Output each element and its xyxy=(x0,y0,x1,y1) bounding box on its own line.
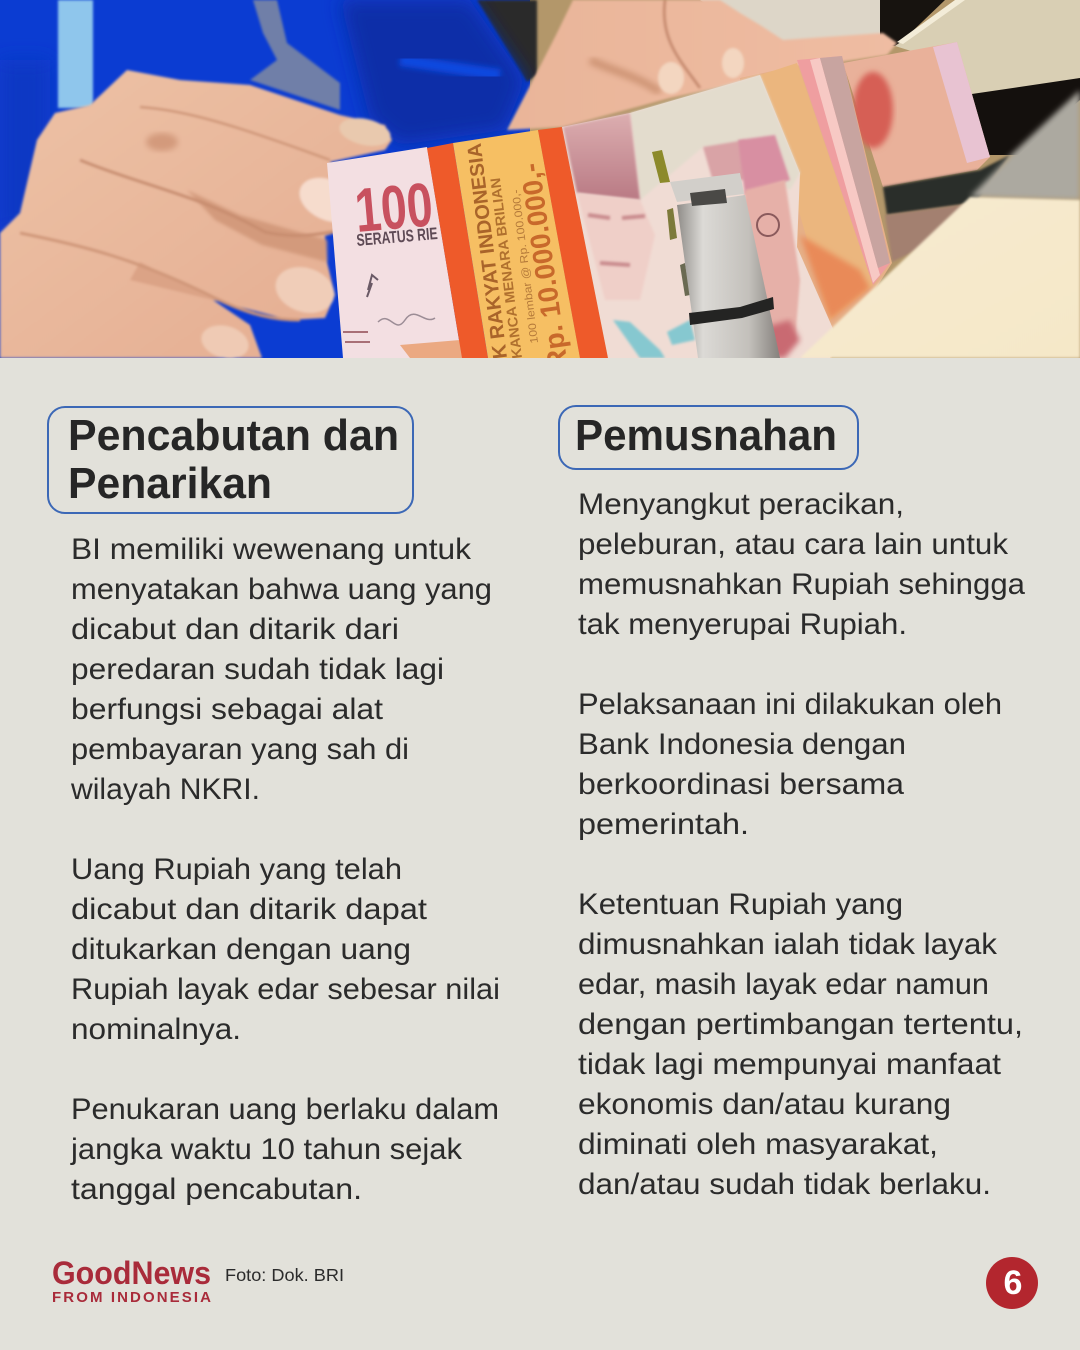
right heading: Pemusnahan xyxy=(575,411,837,460)
photo: hands counting a bundle of Rupiah banknotes xyxy=(0,0,1080,371)
photo: hands counting a bundle of Rupiah banknotes: SERATUS RIE xyxy=(356,225,438,251)
left body text: dicabut dan ditarik dapat xyxy=(71,893,428,926)
back banknote stack xyxy=(843,42,990,187)
front banknote xyxy=(327,147,462,358)
knuckle xyxy=(146,133,178,151)
right body text: berkoordinasi bersama xyxy=(578,768,904,801)
left heading xyxy=(68,411,399,508)
right body text: Menyangkut peracikan, xyxy=(578,488,904,521)
left body text: menyatakan bahwa uang yang xyxy=(71,573,492,606)
portrait face xyxy=(577,193,655,300)
left heading box xyxy=(48,407,413,513)
right body text: edar, masih layak edar namun xyxy=(578,968,989,1001)
right body text: peleburan, atau cara lain untuk xyxy=(578,528,1009,561)
right body text: diminati oleh masyarakat, xyxy=(578,1128,938,1161)
left hand xyxy=(0,70,393,364)
right body text: Ketentuan Rupiah yang xyxy=(578,888,903,921)
left body text: berfungsi sebagai alat xyxy=(71,693,384,726)
logo: GoodNews from Indonesia: FROM INDONESIA xyxy=(52,1289,211,1306)
bank strap: Rp. 10.000.000,- xyxy=(514,161,574,371)
page number badge: 6 xyxy=(1004,1264,1022,1302)
second portrait xyxy=(738,135,790,195)
map detail xyxy=(613,320,665,358)
left body text: ditukarkan dengan uang xyxy=(71,933,411,966)
left heading: Penarikan xyxy=(68,459,272,508)
right body text: memusnahkan Rupiah sehingga xyxy=(578,568,1025,601)
fingernails xyxy=(658,62,684,94)
bank strap: 100 lembar @ Rp. 100.000,- xyxy=(510,188,541,344)
fingernails xyxy=(339,116,392,146)
left body text: wilayah NKRI. xyxy=(70,773,260,806)
shirt stripe xyxy=(58,0,93,108)
right body text xyxy=(578,488,1025,1201)
logo: GoodNews from Indonesia: GoodNews xyxy=(52,1255,211,1291)
right body text: dan/atau sudah tidak berlaku. xyxy=(578,1168,991,1201)
right hand xyxy=(507,0,897,130)
left body text: Rupiah layak edar sebesar nilai xyxy=(71,973,500,1006)
foreground envelope xyxy=(800,197,1080,358)
logo: GoodNews from Indonesia xyxy=(52,1255,211,1306)
right body text: ekonomis dan/atau kurang xyxy=(578,1088,951,1121)
right body text: pemerintah. xyxy=(578,808,749,841)
left body text: pembayaran yang sah di xyxy=(71,733,409,766)
right body text: tak menyerupai Rupiah. xyxy=(578,608,907,641)
left body text: Penukaran uang berlaku dalam xyxy=(71,1093,499,1126)
lanyard xyxy=(250,0,340,110)
left body text: BI memiliki wewenang untuk xyxy=(71,533,472,566)
left body text: tanggal pencabutan. xyxy=(71,1173,362,1206)
metal clamp cylinder xyxy=(670,173,780,358)
left body text: dicabut dan ditarik dari xyxy=(71,613,399,646)
page number badge xyxy=(986,1257,1038,1309)
portrait hat xyxy=(563,113,640,200)
gap between fingers xyxy=(187,190,327,262)
side of bundle xyxy=(740,56,892,360)
photo backdrop: shirt and table xyxy=(0,0,1080,358)
left body text xyxy=(70,533,500,1206)
roller xyxy=(883,155,1010,215)
left heading: Pencabutan dan xyxy=(68,411,399,460)
photo: hands counting a bundle of Rupiah banknotes: 100 xyxy=(352,169,435,246)
right body text: dengan pertimbangan tertentu, xyxy=(578,1008,1023,1041)
left column: Pencabutan dan Penarikan xyxy=(48,407,500,1206)
security thread xyxy=(652,150,670,183)
right column: Pemusnahan xyxy=(559,406,1025,1201)
bank strap xyxy=(427,127,608,371)
left body text: nominalnya. xyxy=(71,1013,241,1046)
right heading box xyxy=(559,406,858,469)
grey blurred object xyxy=(970,90,1080,200)
right body text: dimusnahkan ialah tidak layak xyxy=(578,928,998,961)
bank strap: KANCA MENARA BRILIAN xyxy=(487,177,525,360)
left body text: Uang Rupiah yang telah xyxy=(71,853,402,886)
right body text: Bank Indonesia dengan xyxy=(578,728,906,761)
left body text: jangka waktu 10 tahun sejak xyxy=(70,1133,463,1166)
portrait banknote xyxy=(562,75,838,358)
right body text: tidak lagi mempunyai manfaat xyxy=(578,1048,1002,1081)
photo credit: Foto: Dok. BRI xyxy=(225,1265,344,1285)
right body text: Pelaksanaan ini dilakukan oleh xyxy=(578,688,1002,721)
bank strap: K RAKYAT INDONESIA xyxy=(464,142,512,360)
finger creases xyxy=(140,107,330,160)
left body text: peredaran sudah tidak lagi xyxy=(71,653,444,686)
